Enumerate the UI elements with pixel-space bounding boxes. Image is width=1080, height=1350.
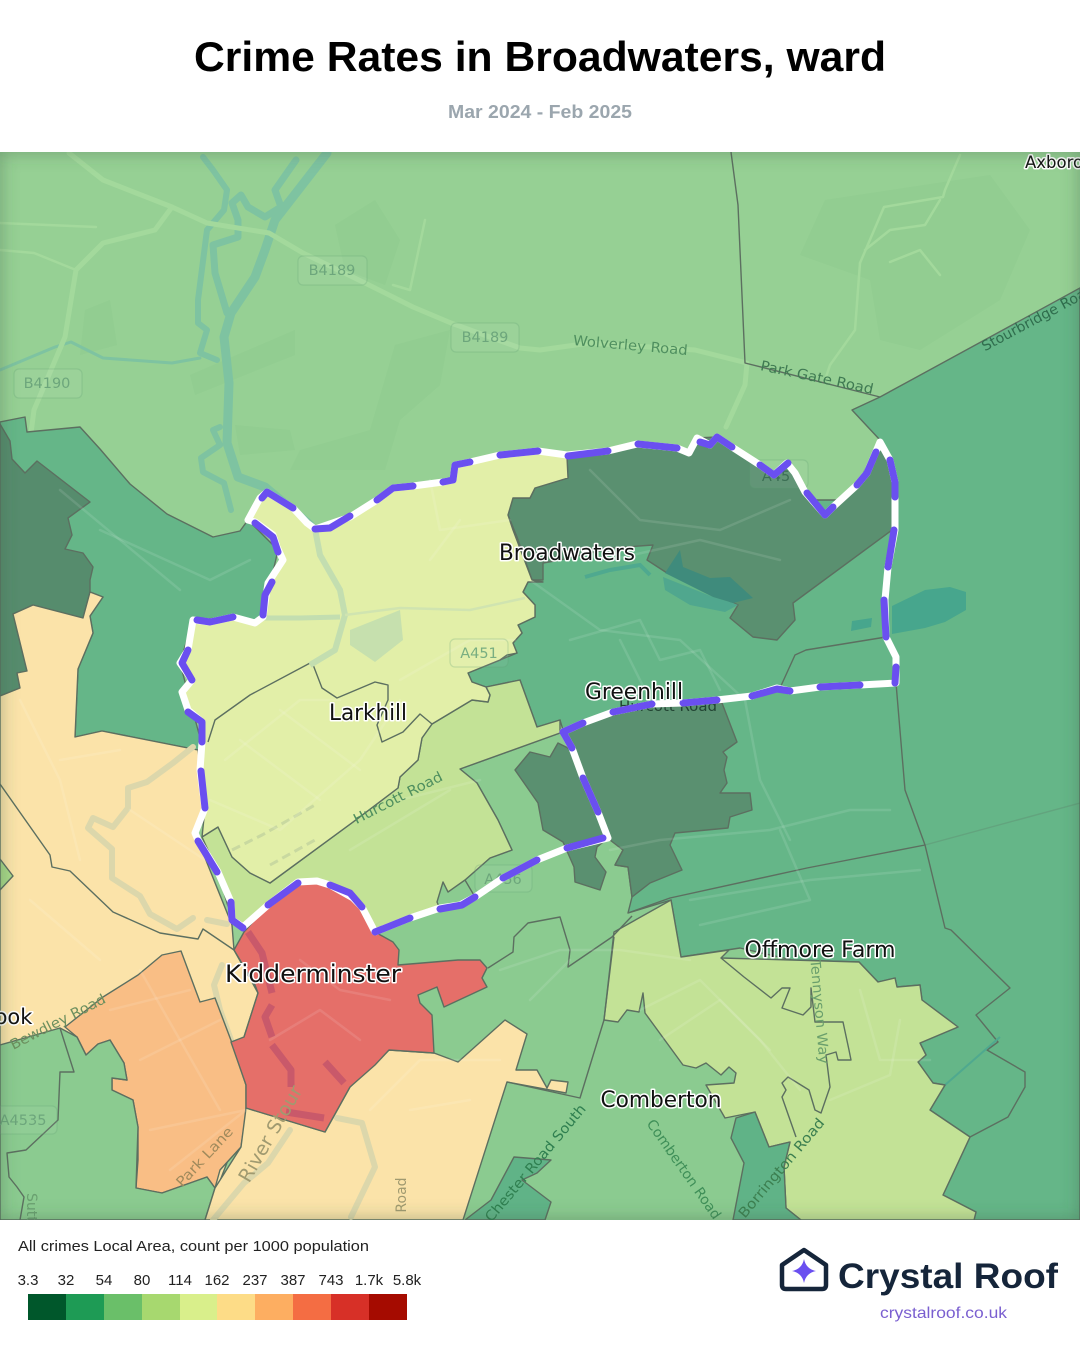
road shield: A451: A451 xyxy=(460,646,498,662)
district: small green at west edge xyxy=(0,859,13,890)
ward boundary: white base xyxy=(180,437,896,932)
road shield: A45: A45 xyxy=(762,469,790,485)
icon: house with star xyxy=(782,1250,826,1289)
legend tick labels: 114 xyxy=(168,1272,192,1289)
Borrington pocket dark green xyxy=(731,1112,801,1220)
road labels: Hurcott Road xyxy=(351,769,445,828)
boundary line north xyxy=(731,152,880,397)
district: Hurcott light green xyxy=(202,680,560,932)
lake in Broadwaters xyxy=(585,550,753,612)
south-central rivers xyxy=(213,1118,375,1220)
place label: Offmore Farm: Offmore Farm xyxy=(744,938,896,963)
west beige boundary xyxy=(0,784,234,950)
road shield: A4535 xyxy=(0,1106,57,1134)
road labels: Wolverley Road xyxy=(572,333,688,359)
legend tick labels: 1.7k xyxy=(355,1272,384,1289)
legend tick labels: 743 xyxy=(318,1272,344,1289)
district: east zone boundaries xyxy=(628,637,1080,1137)
road labels: Chester Road South xyxy=(482,1102,590,1225)
district: north-west darkest xyxy=(0,424,93,696)
road labels: Road xyxy=(394,1177,410,1213)
road labels: Sutton xyxy=(23,1193,39,1239)
road shield: A45 xyxy=(750,460,808,488)
road shield: B4189: B4189 xyxy=(309,263,355,279)
road shield: A451 xyxy=(450,639,508,667)
rivers north xyxy=(0,153,327,525)
Offmore Farm inner boundary xyxy=(721,958,851,1137)
road labels xyxy=(8,282,1080,1239)
district: west of Greenhill darkest xyxy=(515,743,608,890)
legend tick labels: 32 xyxy=(58,1272,74,1289)
ward boundary: purple dashes xyxy=(182,437,896,932)
district: Offmore Farm light green xyxy=(604,900,976,1220)
road shield: A456: A456 xyxy=(484,872,522,888)
river through red district xyxy=(248,932,344,1118)
road labels: Hurcott Road xyxy=(619,699,717,715)
logo: Crystal Roof xyxy=(782,1250,1058,1322)
park shading north xyxy=(80,175,1030,470)
subtitle: date range: Mar 2024 - Feb 2025 xyxy=(448,102,632,122)
road shield: B4189 east: B4189 xyxy=(462,330,508,346)
legend tick labels: 237 xyxy=(242,1272,268,1289)
road labels: Park Gate Road xyxy=(759,358,875,398)
district: Greenhill and east green xyxy=(468,288,1080,1220)
district: south-central beige xyxy=(205,1020,568,1220)
legend tick labels: 80 xyxy=(134,1272,150,1289)
district: salmon area xyxy=(65,951,246,1193)
Chester Road pocket dark green xyxy=(465,1157,551,1220)
legend xyxy=(18,1239,422,1320)
south-west inner boundary xyxy=(7,1028,74,1220)
road labels: Park Lane xyxy=(173,1124,237,1191)
place label: Kidderminster: Kidderminster xyxy=(225,960,401,988)
legend tick labels: 387 xyxy=(280,1272,306,1289)
place label: Greenhill: Greenhill xyxy=(585,680,683,705)
Larkhill river and park xyxy=(232,529,525,865)
logo url: crystalroof.co.uk xyxy=(880,1305,1008,1322)
place label: Broadwaters: Broadwaters xyxy=(499,541,635,566)
legend tick labels: 162 xyxy=(204,1272,230,1289)
title: Crime Rates in Broadwaters, ward xyxy=(194,33,886,80)
district: west beige xyxy=(0,592,258,1220)
place label: Larkhill: Larkhill xyxy=(329,701,407,726)
logo wordmark: Crystal Roof xyxy=(838,1257,1058,1296)
street network xyxy=(20,470,930,1170)
district: Greenhill darkest xyxy=(563,703,752,897)
legend colour bar xyxy=(28,1294,407,1320)
river west xyxy=(88,747,231,1040)
road labels: Bewdley Road xyxy=(8,991,109,1053)
legend tick labels: 3.3 xyxy=(18,1272,38,1289)
Larkhill inner boundary xyxy=(208,662,432,742)
road shield: B4190: B4190 xyxy=(24,376,70,392)
road labels: Tennyson Way xyxy=(806,958,832,1065)
road shield: B4190 xyxy=(14,369,82,398)
district: south-west green xyxy=(0,1028,215,1220)
legend tick labels: 5.8k xyxy=(393,1272,422,1289)
district: Broadwaters darkest xyxy=(508,437,895,640)
road shield: B4189 xyxy=(298,256,367,285)
legend tick labels: 54 xyxy=(96,1272,112,1289)
south-central boundaries xyxy=(488,916,632,1098)
district: mid-green south centre xyxy=(360,840,800,1220)
legend title: All crimes Local Area, count per 1000 population xyxy=(18,1239,369,1255)
east stream and lake xyxy=(851,587,1000,1086)
road labels: Comberton Road xyxy=(643,1117,724,1223)
road shield: B4189 east xyxy=(451,323,519,352)
road labels: River Stour xyxy=(234,1082,307,1186)
legend tick labels xyxy=(18,1272,422,1289)
place label: Comberton: Comberton xyxy=(600,1088,722,1113)
road shield: A456 xyxy=(475,865,532,892)
district: mid-green Hurcott side xyxy=(462,734,567,894)
district: Larkhill and upper Broadwaters pale xyxy=(180,451,568,883)
road labels: Borrington Road xyxy=(736,1115,828,1221)
district: Kidderminster red xyxy=(231,882,487,1132)
roads north xyxy=(0,153,960,433)
district: far-west dark green xyxy=(0,417,278,750)
road shield: A4535: A4535 xyxy=(0,1113,46,1129)
